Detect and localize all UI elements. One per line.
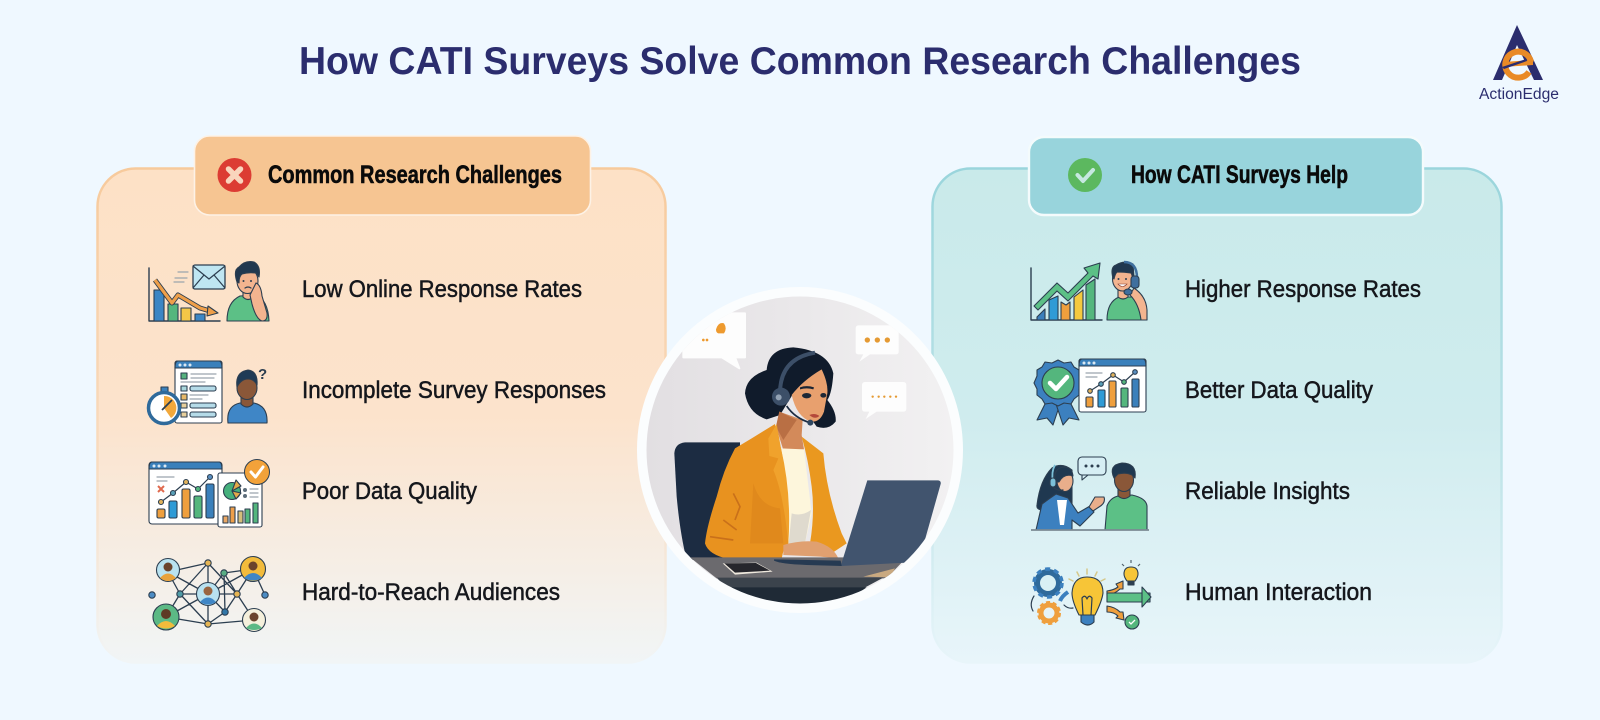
- icon: red cross: [218, 158, 252, 192]
- row label: Reliable Insights: [1185, 478, 1350, 505]
- row: human interaction: [1031, 560, 1372, 629]
- laptop: [841, 480, 941, 566]
- hands: [783, 541, 838, 558]
- speech bubble upper right: [856, 325, 899, 362]
- row label: Poor Data Quality: [302, 478, 477, 505]
- desk: [690, 557, 907, 578]
- icon: agent talking with respondent: [1031, 457, 1149, 530]
- illustration: [646, 296, 954, 610]
- icon: stopwatch, form and confused man: ?: [258, 366, 267, 383]
- top: [781, 448, 812, 547]
- icon: network of people: [149, 556, 268, 632]
- row label: Hard-to-Reach Audiences: [302, 579, 560, 606]
- badge heading: Common Research Challenges: [268, 161, 562, 189]
- badge: common research challenges: [194, 136, 590, 215]
- row label: Higher Response Rates: [1185, 276, 1421, 303]
- chair: [674, 442, 740, 560]
- icon: stopwatch, form and confused man: [148, 361, 267, 424]
- logo mark: [1493, 25, 1543, 80]
- logo wordmark: ActionEdge: [1479, 86, 1559, 103]
- row: incomplete survey responses: [148, 361, 606, 424]
- panel: common research challenges: [98, 136, 666, 662]
- title: How CATI Surveys Solve Common Research Challenges: [299, 40, 1301, 83]
- logo: ActionEdge: [1479, 25, 1559, 103]
- badge heading: How CATI Surveys Help: [1131, 161, 1348, 189]
- row label: Better Data Quality: [1185, 377, 1373, 404]
- phone: [723, 563, 773, 575]
- row: poor data quality: [149, 460, 477, 527]
- row label: Incomplete Survey Responses: [302, 377, 606, 404]
- row: low online response rates: [149, 262, 582, 321]
- panel background: [932, 168, 1502, 662]
- hair: [745, 347, 836, 428]
- blazer: [705, 424, 789, 559]
- badge: how CATI surveys help: [1029, 137, 1423, 215]
- icon: dashboards with mixed charts: [149, 460, 270, 527]
- row: hard-to-reach audiences: [149, 556, 560, 632]
- icon: green check: [1068, 158, 1102, 192]
- row: higher response rates: [1031, 262, 1421, 320]
- panel: how CATI surveys help: [932, 137, 1502, 662]
- white ring: [642, 292, 958, 608]
- neck: [776, 412, 804, 450]
- speech bubble lower right: [862, 382, 906, 419]
- icon: falling chart, envelope and worried man: [149, 262, 269, 321]
- row label: Low Online Response Rates: [302, 276, 582, 303]
- panel background: [98, 168, 666, 662]
- speech bubble large: [683, 313, 745, 368]
- row label: Human Interaction: [1185, 579, 1372, 606]
- icon: gears, lightbulb and arrows: [1031, 560, 1151, 629]
- row: reliable insights: [1031, 457, 1350, 530]
- icon: rising chart and smiling agent: [1031, 262, 1147, 320]
- central illustration: call centre agent: [642, 292, 958, 610]
- headset: [772, 353, 815, 426]
- row: better data quality: [1034, 359, 1373, 425]
- icon: award ribbon and dashboard: [1034, 359, 1146, 425]
- face: [792, 369, 827, 422]
